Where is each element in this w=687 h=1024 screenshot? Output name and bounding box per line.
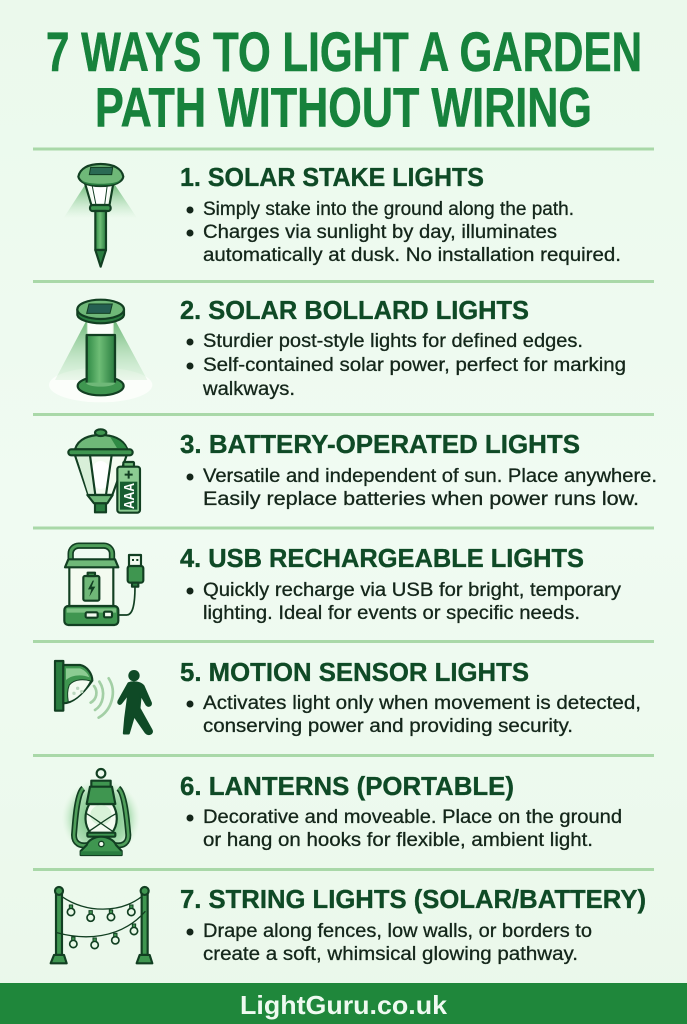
bullet text [186, 693, 641, 737]
bullet text: Quickly recharge via USB for bright, temporary [203, 580, 622, 601]
heading: 6. LANTERNS (PORTABLE) [180, 771, 514, 801]
icon: string lights between posts [51, 887, 152, 963]
battery label: AAA [121, 483, 138, 509]
bullet text: or hang on hooks for flexible, ambient light. [203, 830, 593, 851]
panel: solar stake lights [63, 162, 621, 267]
bullet text: Drape along fences, low walls, or borders to [203, 921, 592, 942]
bullet text: Sturdier post-style lights for defined edges. [203, 331, 583, 352]
bullet text: Versatile and independent of sun. Place anywhere. [203, 466, 657, 487]
bullet text: conserving power and providing security. [203, 716, 573, 737]
panel: solar bollard lights [49, 295, 626, 402]
bullet text: create a soft, whimsical glowing pathway. [203, 944, 578, 965]
panel: string lights [51, 884, 646, 965]
icon: USB lantern [64, 546, 143, 625]
bullet text [186, 466, 657, 510]
bullet text: automatically at dusk. No installation required. [203, 245, 621, 266]
icon: motion sensor and walking person [55, 661, 152, 734]
bullet text [186, 199, 621, 266]
footer [0, 983, 687, 1024]
icon: battery lantern [68, 429, 140, 513]
icon: solar stake light [63, 164, 137, 267]
panel: motion sensor lights [55, 657, 641, 737]
heading: 1. SOLAR STAKE LIGHTS [180, 162, 484, 192]
bullet text: walkways. [202, 379, 295, 400]
icon: solar bollard light [49, 300, 152, 402]
bullet text [186, 807, 622, 851]
bullet text: lighting. Ideal for events or specific needs. [203, 603, 580, 624]
heading: 5. MOTION SENSOR LIGHTS [180, 657, 529, 687]
bullet text: Easily replace batteries when power runs low. [203, 489, 639, 510]
title [46, 20, 642, 138]
bullet text [186, 580, 622, 624]
heading: 2. SOLAR BOLLARD LIGHTS [180, 295, 529, 325]
heading: 4. USB RECHARGEABLE LIGHTS [180, 543, 584, 573]
heading: 7. STRING LIGHTS (SOLAR/BATTERY) [180, 884, 646, 914]
bullet text: Charges via sunlight by day, illuminates [203, 222, 557, 243]
panel: USB rechargeable lights [64, 543, 622, 625]
bullet text: Self-contained solar power, perfect for marking [203, 355, 626, 376]
icon: portable lantern [62, 769, 140, 858]
panel: portable lanterns [62, 769, 622, 858]
panel: battery-operated lights [68, 429, 657, 513]
bullet text [186, 921, 592, 965]
bullet text [186, 331, 626, 400]
bullet text: Simply stake into the ground along the path. [203, 199, 574, 220]
bullet text: Decorative and moveable. Place on the ground [203, 807, 622, 828]
footer: LightGuru.co.uk [240, 990, 448, 1020]
heading: 3. BATTERY-OPERATED LIGHTS [180, 429, 580, 459]
bullet text: Activates light only when movement is detected, [203, 693, 641, 714]
